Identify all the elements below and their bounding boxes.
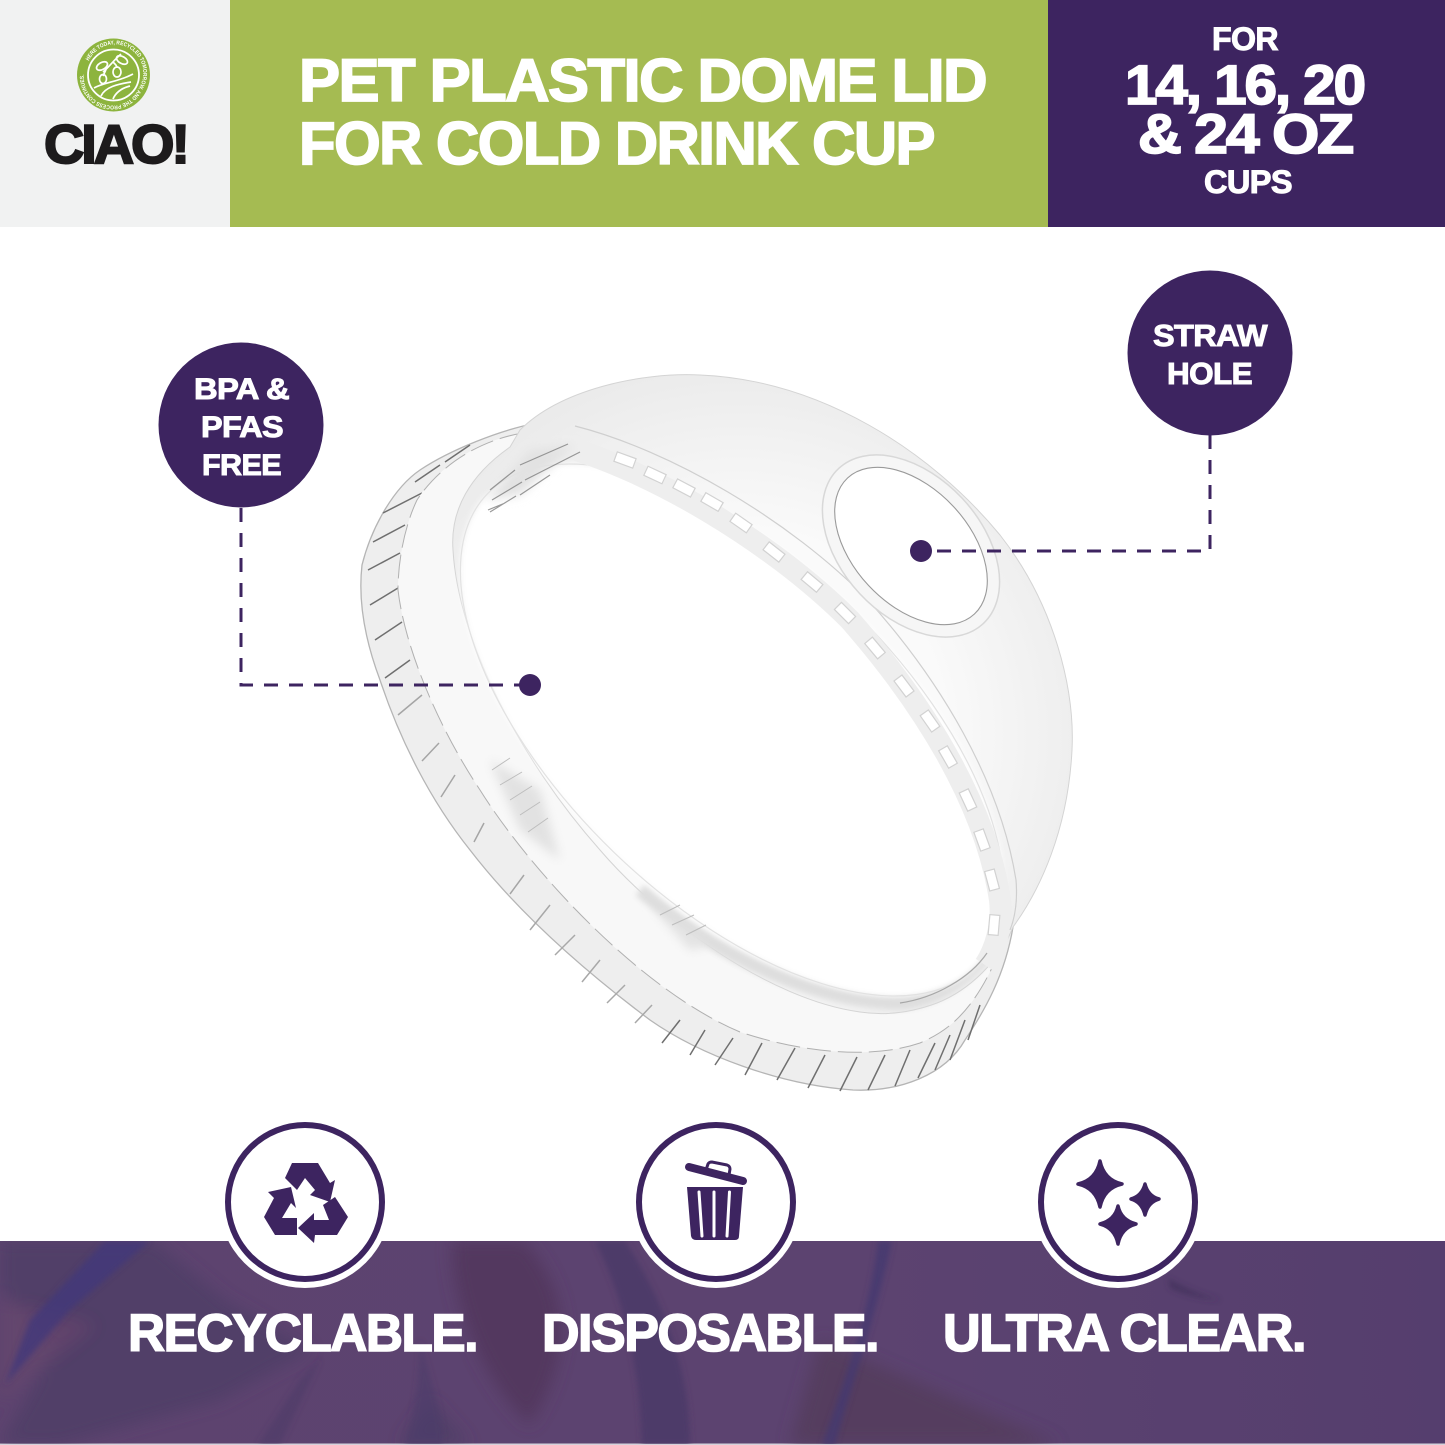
callout: straw hole <box>910 270 1292 562</box>
icon: trash can <box>630 1116 802 1288</box>
leader line <box>921 435 1210 551</box>
feature: disposable <box>542 1116 878 1363</box>
lower dome shadow <box>640 890 1000 1003</box>
cup size text: FOR <box>1212 21 1278 57</box>
icon: sparkles <box>1032 1116 1204 1288</box>
inner rim outline <box>369 372 1095 1088</box>
straw hole <box>788 421 1034 671</box>
badge <box>158 342 324 508</box>
cup size text: & 24 OZ <box>1138 102 1353 165</box>
label: RECYCLABLE. <box>128 1304 477 1363</box>
logo wordmark: CIAO! <box>44 113 187 175</box>
header: cup size panel <box>1048 0 1445 227</box>
marker dot <box>519 674 541 696</box>
feature: recyclable <box>128 1116 477 1363</box>
header: logo panel <box>0 0 230 227</box>
cup size text: 14, 16, 20 <box>1125 53 1364 116</box>
texture patches <box>485 444 987 1003</box>
leader line <box>241 508 530 685</box>
bottom band with blurred leaves <box>0 1241 1445 1445</box>
feature: ultra clear <box>943 1116 1305 1363</box>
cup size text: CUPS <box>1204 164 1292 200</box>
label: ULTRA CLEAR. <box>943 1304 1305 1363</box>
badge: STRAW <box>1153 318 1268 353</box>
badge: BPA & <box>194 373 289 406</box>
title: PET PLASTIC DOME LID <box>299 47 986 114</box>
lid rim with ticks <box>361 423 1013 1091</box>
rim plateau <box>398 433 1000 1052</box>
badge: PFAS <box>201 411 283 444</box>
callout: BPA and PFAS free <box>158 342 541 696</box>
icon: recycle <box>219 1116 391 1288</box>
inner white dome face <box>369 372 1095 1088</box>
badge: FREE <box>202 449 281 482</box>
cup size text <box>1125 21 1364 200</box>
product: clear dome lid <box>361 372 1095 1091</box>
label: DISPOSABLE. <box>542 1304 878 1363</box>
badge: HOLE <box>1167 356 1252 391</box>
dome <box>453 375 1072 1014</box>
header: title panel <box>230 0 1048 227</box>
badge <box>1128 270 1292 436</box>
title: FOR COLD DRINK CUP <box>299 110 934 177</box>
title <box>299 47 986 177</box>
rim band with vents <box>560 426 1017 965</box>
marker dot <box>910 540 932 562</box>
logo emblem: HERE TODAY, RECYCLED TOMORROW. AND THE PROCESS CONTINUES. <box>80 40 148 110</box>
